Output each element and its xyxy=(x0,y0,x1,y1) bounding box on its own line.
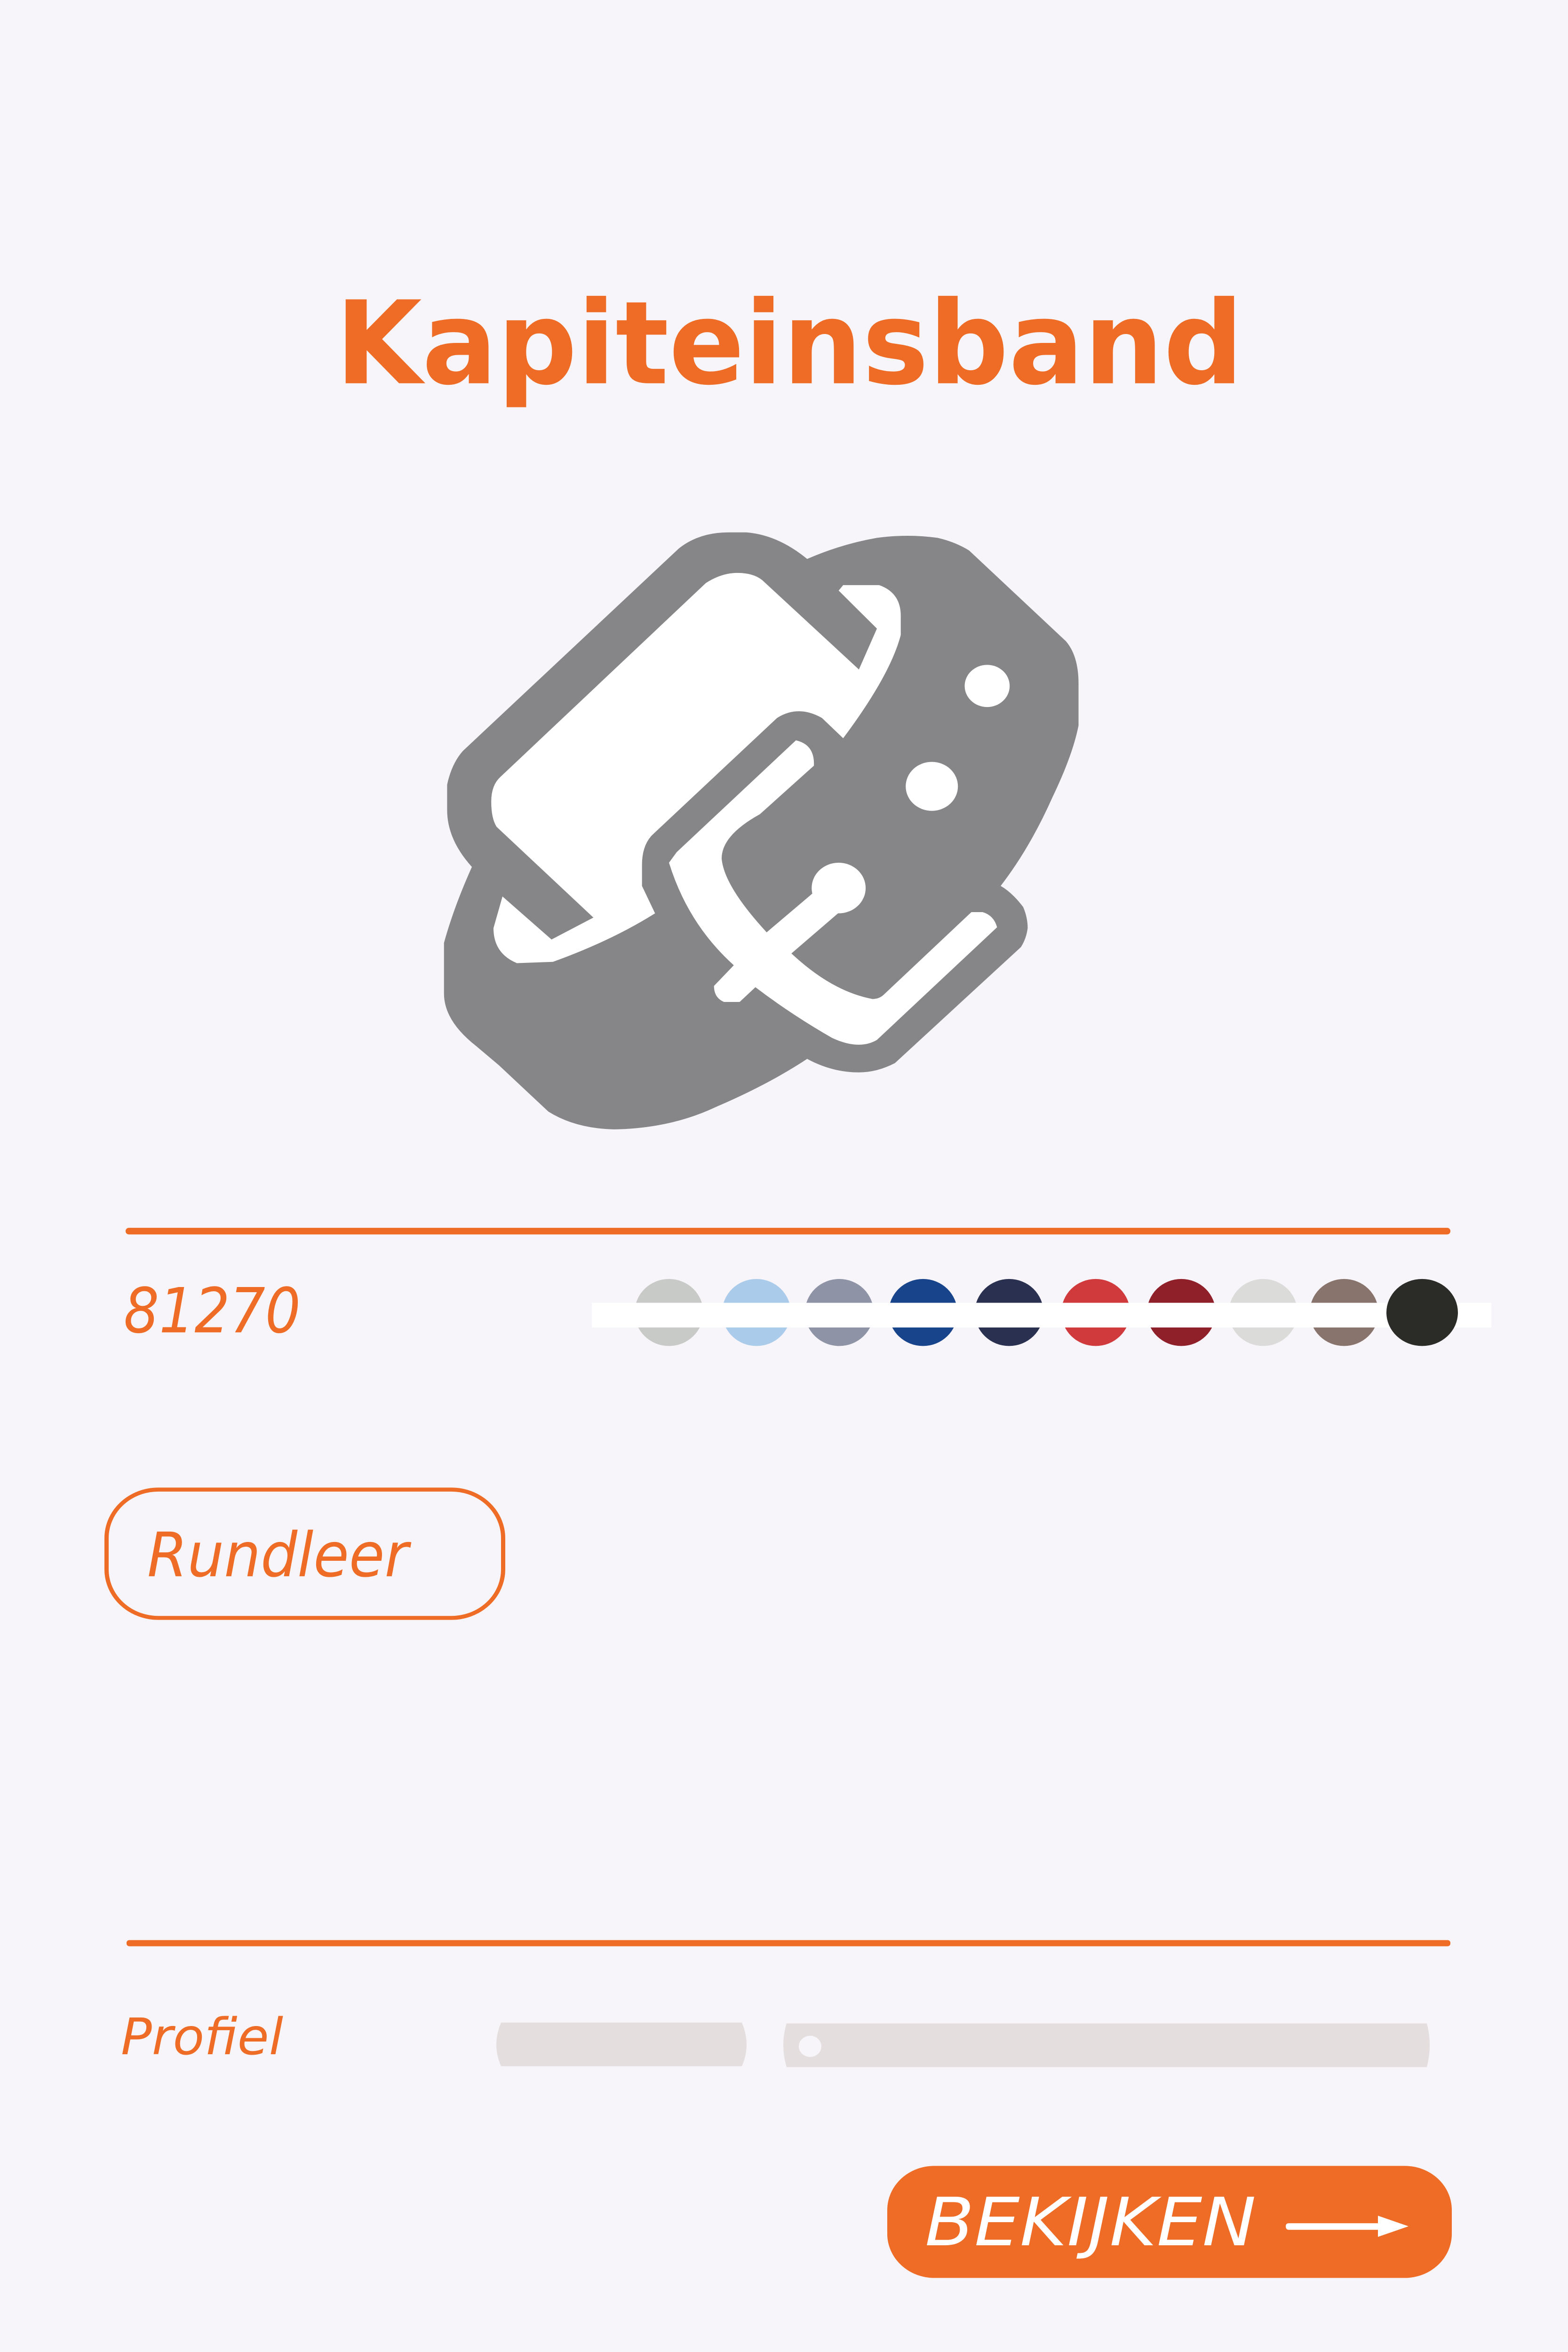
divider bottom xyxy=(127,1940,1450,1946)
profile: cross section bar xyxy=(496,2023,747,2066)
title: Kapiteinsband xyxy=(335,276,1243,411)
article number: 81270 xyxy=(124,1275,301,1347)
divider top xyxy=(126,1228,1450,1234)
button: bekijken xyxy=(887,2166,1452,2278)
icon: buckle tongue knob xyxy=(812,863,866,914)
profile label: Profiel xyxy=(121,2008,283,2066)
material tag: Rundleer xyxy=(147,1519,412,1591)
icon: belt xyxy=(444,532,1079,1129)
icon: buckle xyxy=(669,740,997,1045)
icon: belt hole upper xyxy=(965,665,1010,707)
icon: belt hole lower xyxy=(906,762,958,811)
arrow xyxy=(1286,2216,1409,2237)
colour swatches xyxy=(592,1279,1491,1346)
profile: side view bar xyxy=(783,2024,1430,2067)
icon: belt strap xyxy=(491,573,901,963)
material tag xyxy=(106,1490,503,1618)
button: bekijken: BEKIJKEN xyxy=(925,2184,1256,2261)
